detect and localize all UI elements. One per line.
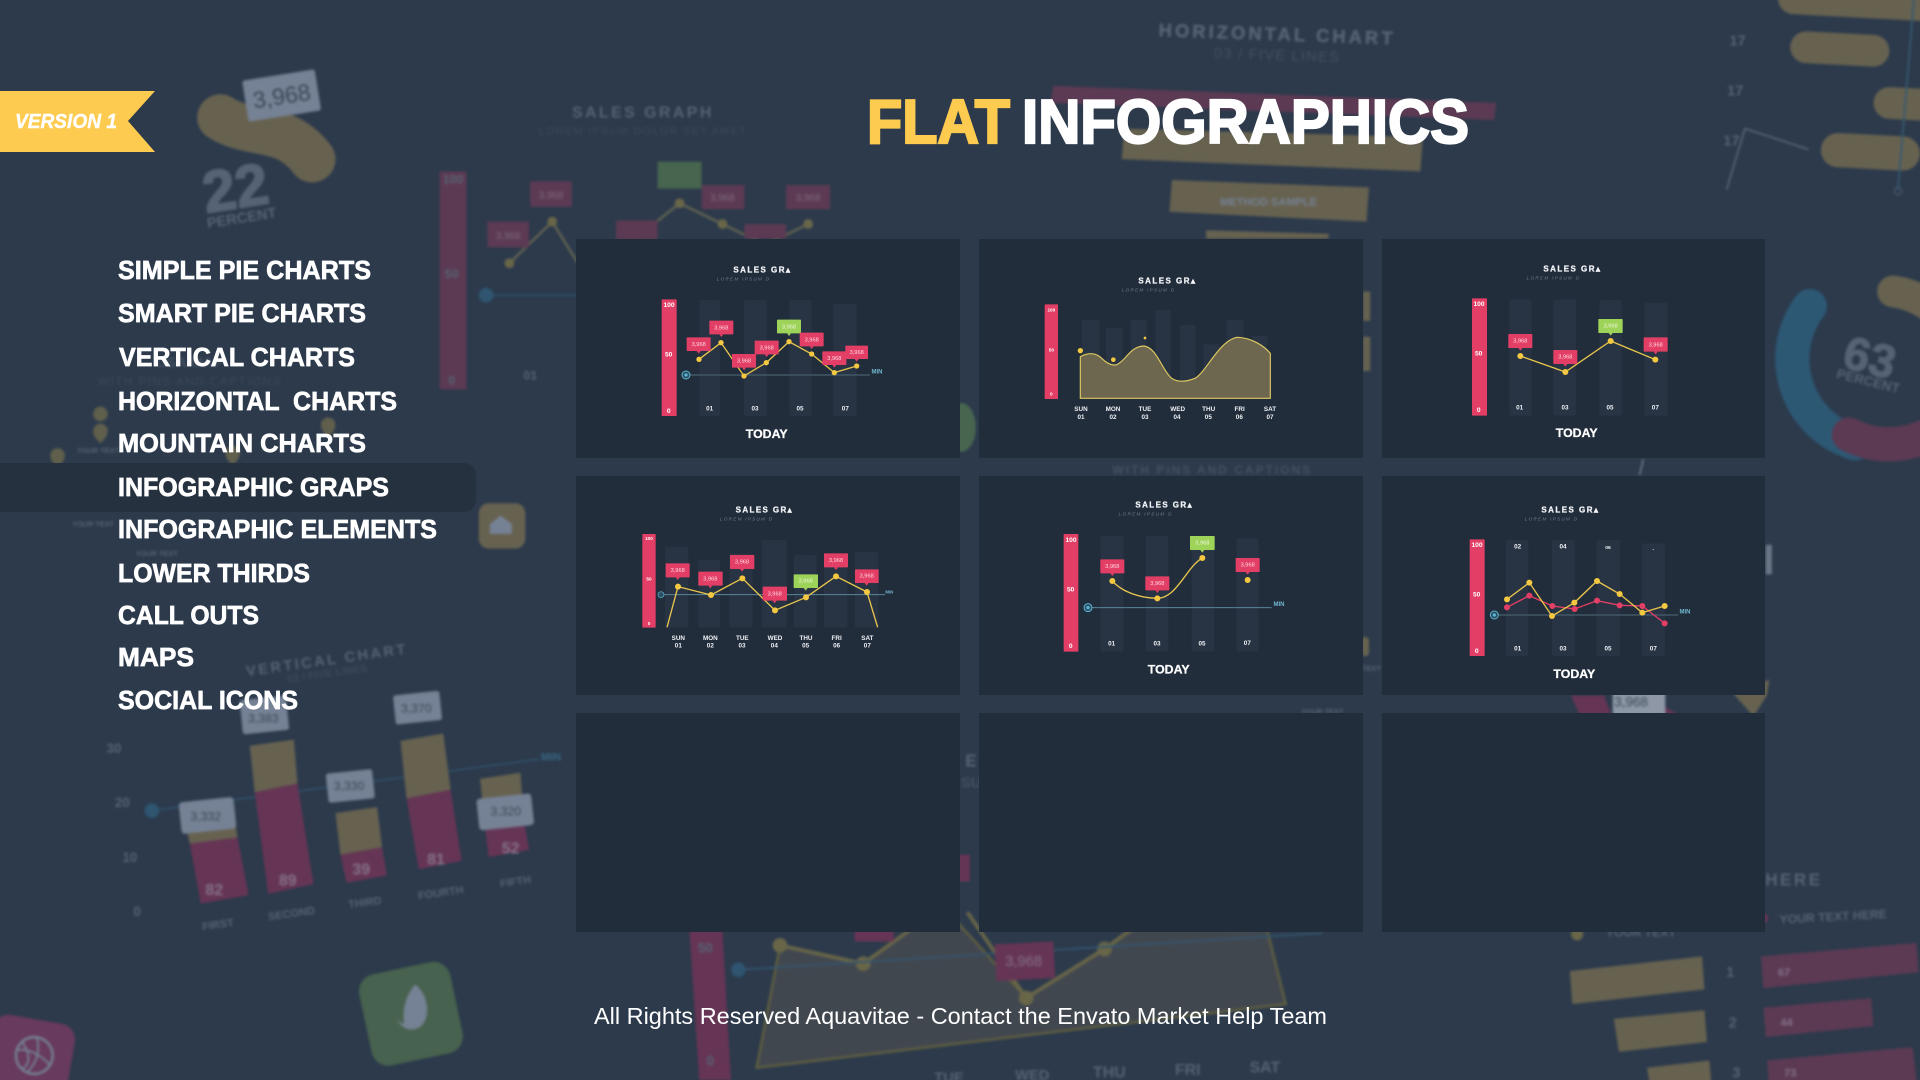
chart 3 content: 3,968 <box>1649 342 1663 348</box>
background: donut with 63 percent: PERCENT <box>1835 366 1902 396</box>
chart 2 content: THU <box>1202 406 1216 413</box>
background: vertical chart fragment: VERTICAL CHART <box>245 642 409 680</box>
background: vertical chart fragment: FIFTH <box>499 874 532 890</box>
background: vertical chart fragment: 52 <box>502 840 520 857</box>
chart 5 content: 3,968 <box>1241 563 1255 569</box>
chart 4 content: 3,968 <box>703 576 717 582</box>
version ribbon <box>0 91 155 152</box>
background: bottom-right paired bars: HERE <box>1765 869 1823 889</box>
chart 3 content: 05 <box>1606 404 1614 411</box>
chart 4 content: 3,968 <box>799 579 813 585</box>
chart 3 content: 3,968 <box>1558 355 1572 361</box>
chart 3 content: 3,968 <box>1604 324 1618 330</box>
chart 1 content <box>662 265 882 441</box>
chart 2 content: SALES GR▴ <box>1138 277 1196 286</box>
chart 5 content: 50 <box>1067 587 1075 594</box>
chart 1 content: 03 <box>751 405 759 412</box>
chart 6 content: 100 <box>1471 542 1483 549</box>
background: sales graph fragment: 100 <box>443 173 463 187</box>
chart 1 content: 3,968 <box>782 324 796 330</box>
panel: weekly line chart <box>576 476 960 695</box>
background: fragments showing through panel gaps: WITH PINS AND CAPTIONS <box>1112 463 1312 477</box>
chart 2 content: MON <box>1106 406 1121 413</box>
chart 4 content: 02 <box>707 643 714 650</box>
chart 1 content: 3,968 <box>737 359 751 365</box>
background: bottom-centre mountain chart: 3,968 <box>1005 954 1042 970</box>
chart 2 content: FRI <box>1235 406 1245 413</box>
chart 6 content: 03 <box>1559 645 1567 652</box>
chart 2 content: 05 <box>1205 414 1212 421</box>
category menu <box>118 255 437 715</box>
empty panel row 3 centre <box>979 713 1363 932</box>
background: vertical chart fragment: MIN <box>541 751 561 763</box>
chart 2 content: 50 <box>1049 348 1054 353</box>
category menu: SOCIAL ICONS <box>118 685 298 715</box>
panel: smooth line chart <box>979 476 1363 695</box>
chart 4 content: FRI <box>832 635 842 642</box>
category menu: LOWER THIRDS <box>118 558 310 588</box>
chart 2 content: 06 <box>1236 414 1243 421</box>
background: sales graph fragment <box>440 105 830 389</box>
chart 2 content: LOREM IPSUM D <box>1122 288 1175 293</box>
chart 3 content <box>1472 264 1668 440</box>
chart 6 content: 01 <box>1514 645 1522 652</box>
chart 6 content: 50 <box>1473 592 1481 599</box>
background: vertical chart fragment: 3,320 <box>490 805 521 819</box>
panel: four point line chart <box>1382 239 1765 458</box>
category menu: SIMPLE PIE CHARTS <box>118 255 371 285</box>
background: top-right horizontal bars: 17 <box>1729 33 1746 49</box>
chart 1 content: 50 <box>665 352 673 359</box>
chart 3 content: 100 <box>1473 301 1485 308</box>
chart 3 content: 07 <box>1652 404 1659 411</box>
chart 4 content: 100 <box>645 536 653 541</box>
chart 6 content: - <box>1652 547 1654 553</box>
category menu: MOUNTAIN CHARTS <box>118 428 366 458</box>
chart 5 content <box>1064 501 1284 676</box>
chart 1 content: 3,968 <box>714 325 728 331</box>
chart 1 content: 01 <box>706 405 714 412</box>
chart 3 content: 0 <box>1477 407 1481 414</box>
background: sales graph fragment: 50 <box>445 267 459 281</box>
chart 4 content: THU <box>799 635 813 642</box>
chart 5 content: MIN <box>1274 602 1284 608</box>
background: vertical chart fragment: 3,383 <box>248 711 279 725</box>
chart 1 content: MIN <box>872 369 882 375</box>
chart 4 content: 3,968 <box>829 558 843 564</box>
panel: line chart with pink tags <box>576 239 960 458</box>
chart 6 content: 05 <box>1604 645 1612 652</box>
chart 4 content: 03 <box>738 643 746 650</box>
chart 2 content: 100 <box>1047 307 1056 312</box>
background: donut with 63 percent <box>1792 291 1920 444</box>
background: vertical chart fragment: SECOND <box>267 905 316 923</box>
background: top-right horizontal bars <box>1723 0 1920 195</box>
chart 5 content: 03 <box>1153 640 1161 647</box>
category menu: HORIZONTAL CHARTS <box>118 386 397 416</box>
background: social icon tiles <box>0 959 466 1080</box>
background: bottom-centre mountain chart: FRI <box>1175 1062 1201 1079</box>
chart 2 content: SUN <box>1074 406 1088 413</box>
background: sales graph fragment: SALES GRAPH <box>572 105 714 122</box>
chart 4 content: 50 <box>646 577 652 582</box>
category menu: INFOGRAPHIC ELEMENTS <box>118 514 437 544</box>
chart 4 content: 05 <box>802 643 810 650</box>
chart 4 content: 3,968 <box>860 574 874 580</box>
chart 3 content: LOREM IPSUM D <box>1527 275 1580 280</box>
chart 5 content: TODAY <box>1148 662 1190 676</box>
background: fragments showing through panel gaps <box>947 291 1772 716</box>
chart 6 content: 06 <box>1605 545 1611 551</box>
background: vertical chart fragment: 10 <box>122 850 137 865</box>
chart 4 content: MON <box>703 635 718 642</box>
background: vertical chart fragment: 0 <box>133 904 141 919</box>
chart 1 content: 3,968 <box>827 356 841 362</box>
chart 6 content: 0 <box>1475 648 1479 655</box>
chart 3 content: 50 <box>1475 351 1483 358</box>
background: vertical chart fragment: 30 <box>106 741 121 756</box>
chart 5 content: SALES GR▴ <box>1135 501 1193 510</box>
background: horizontal chart fragment: METHOD SAMPLE <box>1220 197 1317 209</box>
chart 4 content: 3,968 <box>671 568 685 574</box>
panel: mountain area chart <box>979 239 1363 458</box>
background: pie fragment with 22 percent: 3,968 <box>251 79 312 113</box>
background: sales graph fragment: 3,968 <box>496 231 521 242</box>
background: top-right horizontal bars: 17 <box>1727 84 1743 100</box>
background: bottom-centre mountain chart <box>689 751 1322 1080</box>
chart 5 content: 01 <box>1108 640 1116 647</box>
chart 4 content: SUN <box>672 635 685 642</box>
background: donut with 63 percent: 63 <box>1838 326 1901 389</box>
background: bottom-right paired bars: 73 <box>1784 1067 1796 1079</box>
background: horizontal chart fragment <box>1051 19 1496 239</box>
background: vertical chart fragment: 82 <box>205 882 223 899</box>
chart 6 content: TODAY <box>1553 667 1596 681</box>
chart 2 content <box>1045 277 1276 421</box>
background: fragments showing through panel gaps: 3,968 <box>1614 695 1648 710</box>
background: bottom-centre mountain chart: SU <box>961 775 981 791</box>
chart 2 content: SAT <box>1264 406 1276 413</box>
chart 4 content <box>642 505 893 650</box>
background: horizontal chart fragment: 03 / FIVE LINES <box>1214 46 1340 66</box>
chart 4 content: 3,968 <box>768 591 782 597</box>
chart 4 content: WED <box>768 635 783 642</box>
chart 1 content: 100 <box>663 302 675 309</box>
background: bottom-centre mountain chart: E <box>965 751 977 771</box>
background: fragments showing through panel gaps: TEXT <box>1362 664 1381 673</box>
background: vertical chart fragment: 3,330 <box>334 779 364 793</box>
background: vertical chart fragment: 3,332 <box>190 809 221 823</box>
background: bottom-centre mountain chart: SAT <box>1250 1060 1281 1077</box>
main title: FLAT <box>867 88 1010 157</box>
background: bottom-centre mountain chart: 0 <box>706 1053 714 1068</box>
chart 5 content: 3,968 <box>1105 564 1119 570</box>
category menu: SMART PIE CHARTS <box>118 298 366 328</box>
chart 4 content: LOREM IPSUM D <box>720 516 773 521</box>
chart 4 content: 06 <box>833 643 841 650</box>
chart 3 content: SALES GR▴ <box>1543 264 1601 273</box>
background: top-right horizontal bars: 17 <box>1723 134 1740 150</box>
chart 2 content: TUE <box>1139 406 1151 413</box>
chart 2 content: 04 <box>1173 414 1181 421</box>
background: bottom-right paired bars: YOUR TEXT HERE <box>1779 907 1887 927</box>
background: sales graph fragment: 01 <box>523 369 537 383</box>
chart 4 content: 3,968 <box>735 560 749 566</box>
chart 3 content: TODAY <box>1556 426 1598 440</box>
empty panel row 3 left <box>576 713 960 932</box>
background: bottom-right paired bars: 44 <box>1780 1017 1794 1029</box>
chart 1 content: 3,968 <box>760 345 774 351</box>
background: bottom-right paired bars: YOUR TEXT <box>1606 926 1676 940</box>
chart 3 content: 01 <box>1516 404 1524 411</box>
background: USA map fragment <box>50 355 525 558</box>
chart 1 content: 07 <box>842 405 849 412</box>
chart 6 content: 04 <box>1559 543 1567 550</box>
footer copyright text: All Rights Reserved Aquavitae - Contact the Envato Market Help Team <box>594 1003 1327 1029</box>
chart 6 content: LOREM IPSUM D <box>1525 516 1578 521</box>
empty panel row 3 right <box>1382 713 1765 932</box>
background: bottom-right paired bars: 67 <box>1778 967 1790 979</box>
background: vertical chart fragment: FOURTH <box>417 884 465 902</box>
background: sales graph fragment: 3,968 <box>539 190 564 201</box>
background: pie fragment with 22 percent: PERCENT <box>206 205 278 232</box>
background: vertical chart fragment: THIRD <box>347 895 383 911</box>
chart 1 content: 3,968 <box>805 337 819 343</box>
background: vertical chart fragment: 39 <box>352 861 370 878</box>
chart 1 content: SALES GR▴ <box>733 265 791 274</box>
chart 4 content: 04 <box>771 643 778 650</box>
chart 2 content: 01 <box>1077 414 1085 421</box>
chart 1 content: TODAY <box>746 427 788 441</box>
chart 1 content: LOREM IPSUM D <box>717 276 770 281</box>
version ribbon: VERSION 1 <box>15 111 117 133</box>
background: vertical chart fragment: 89 <box>279 872 297 889</box>
background: USA map fragment: USA MAP <box>156 355 224 371</box>
background: sales graph fragment: 3,968 <box>796 193 821 204</box>
chart 4 content: 01 <box>675 643 682 650</box>
chart 2 content: 03 <box>1141 414 1149 421</box>
background: vertical chart fragment: FIRST <box>201 917 235 933</box>
background: bottom-centre mountain chart: 50 <box>698 941 713 956</box>
panel: two series line chart <box>1382 476 1765 695</box>
chart 6 content: MIN <box>1680 609 1690 615</box>
category menu: INFOGRAPHIC GRAPS <box>118 472 389 502</box>
chart 5 content: 3,968 <box>1195 541 1209 547</box>
background: bottom-right paired bars <box>1570 869 1919 1080</box>
chart 4 content: TUE <box>736 635 749 642</box>
background: USA map fragment: YOUR TEXT <box>72 520 115 529</box>
chart 3 content: 03 <box>1561 404 1569 411</box>
chart 3 content: 3,968 <box>1513 339 1527 345</box>
chart 6 content: SALES GR▴ <box>1541 505 1599 514</box>
background: USA map fragment: WITH PINS AND CAPTIONS <box>97 375 282 389</box>
chart 5 content: LOREM IPSUM D <box>1119 512 1172 517</box>
chart 6 content <box>1470 505 1690 681</box>
background: pie fragment with 22 percent <box>198 69 321 232</box>
chart 6 content: 07 <box>1650 645 1657 652</box>
main title: INFOGRAPHICS <box>1022 88 1469 157</box>
chart 5 content: 100 <box>1065 537 1077 544</box>
chart 4 content: 07 <box>864 643 871 650</box>
chart 2 content: 07 <box>1266 414 1274 421</box>
chart 2 content: 02 <box>1109 414 1117 421</box>
chart 5 content: 05 <box>1198 640 1206 647</box>
background: USA map fragment: YOUR TEXT <box>136 549 178 558</box>
chart 5 content: 0 <box>1069 643 1073 650</box>
chart 1 content: 0 <box>667 408 671 415</box>
background: fragments showing through panel gaps: YOUR TEXT <box>1301 707 1344 716</box>
chart 6 content: 02 <box>1514 543 1522 550</box>
category menu: VERTICAL CHARTS <box>119 342 355 372</box>
chart 2 content: WED <box>1170 406 1185 413</box>
background: bottom-right paired bars: 2 <box>1729 1015 1737 1031</box>
background: bottom-right paired bars: 1 <box>1726 965 1734 981</box>
chart 4 content: SAT <box>861 635 874 642</box>
background: vertical chart fragment: 3,370 <box>401 702 432 716</box>
category menu: MAPS <box>118 642 194 672</box>
background: sales graph fragment: 3,968 <box>710 193 735 204</box>
background: sales graph fragment: 0 <box>448 373 455 387</box>
background: vertical chart fragment: 03 / FIVE LINES <box>286 663 368 686</box>
chart 1 content: 3,968 <box>850 350 864 356</box>
background: horizontal chart fragment: HORIZONTAL CHART <box>1158 19 1396 49</box>
background: vertical chart fragment <box>106 642 561 933</box>
chart 2 content: 0 <box>1050 392 1053 397</box>
background: sales graph fragment: LOREM IPSUM DOLOR SET AMET <box>539 126 747 138</box>
background: USA map fragment: YOUR TEXT <box>77 446 119 455</box>
chart 5 content: 3,968 <box>1150 581 1164 587</box>
chart 5 content: 07 <box>1244 640 1251 647</box>
background: vertical chart fragment: 81 <box>427 851 445 868</box>
left menu highlight band <box>0 463 476 512</box>
chart 4 content: 0 <box>648 621 651 626</box>
category menu: CALL OUTS <box>118 600 259 630</box>
background: vertical chart fragment: 20 <box>115 795 130 810</box>
chart 1 content: 05 <box>796 405 804 412</box>
background: pie fragment with 22 percent: 22 <box>198 151 273 226</box>
chart 4 content: MIN <box>885 589 893 594</box>
chart 1 content: 3,968 <box>692 342 706 348</box>
chart 4 content: SALES GR▴ <box>736 505 793 514</box>
